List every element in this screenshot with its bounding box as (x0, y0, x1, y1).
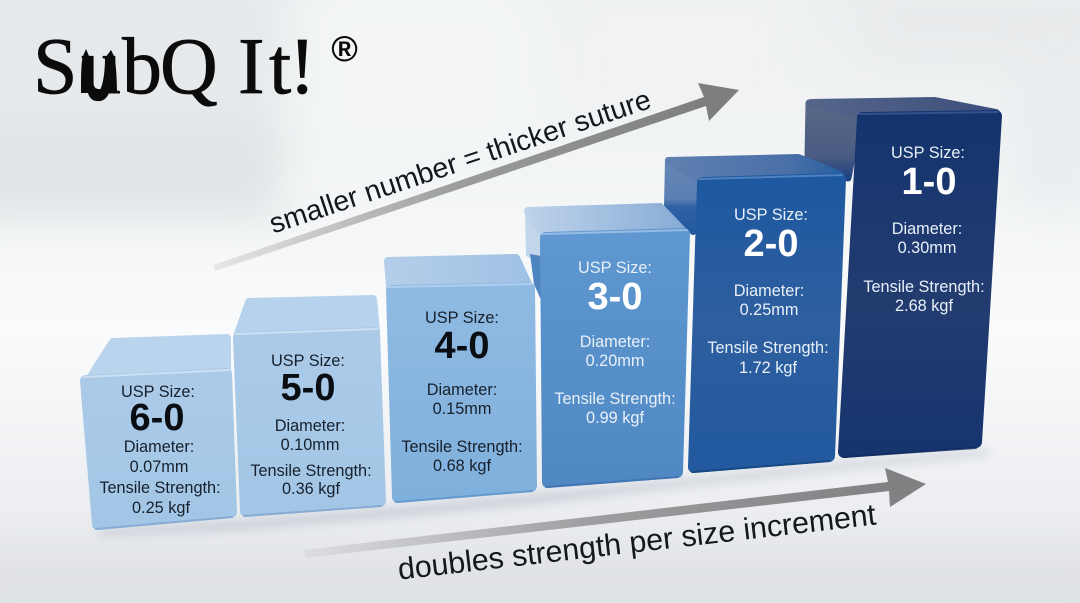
block 5-0 front face (239, 333, 380, 511)
block 6-0 text: 0.25 kgf (132, 499, 190, 517)
block 4-0 text (401, 309, 523, 475)
block 1-0 text: USP Size: (891, 144, 965, 162)
block 1-0 side face (808, 103, 860, 178)
block 4-0 front face (392, 288, 531, 497)
block 3-0 text (554, 259, 676, 427)
block 6-0 top face (90, 338, 227, 378)
block 1-0 text: Tensile Strength: (863, 278, 985, 296)
block 4-0 top face (388, 258, 528, 287)
block 2-0 side face (667, 160, 700, 232)
block 6-0 text: 0.07mm (130, 458, 188, 476)
block 2-0 text: Tensile Strength: (707, 339, 829, 357)
block 2-0 text: Diameter: (734, 282, 804, 300)
block 3-0 text: Diameter: (580, 333, 650, 351)
block 4-0 text: Tensile Strength: (401, 438, 523, 456)
arrow label: smaller number: smaller number = thicker suture (265, 84, 655, 240)
block 4-0 text: 4-0 (435, 325, 489, 367)
block 4-0 text: USP Size: (425, 309, 499, 327)
panel: block 5-0 (236, 299, 381, 516)
block 5-0 text: 5-0 (281, 367, 335, 409)
block 5-0 text: USP Size: (271, 352, 345, 370)
panel: block 1-0 (808, 101, 998, 457)
block 5-0 text: Tensile Strength: (250, 462, 372, 480)
block 2-0 front face (694, 179, 840, 467)
block 4-0 text: 0.68 kgf (433, 457, 491, 475)
block 6-0 text: USP Size: (121, 383, 195, 401)
arrow: smaller number = thicker suture (213, 83, 739, 271)
block 2-0 text (707, 206, 829, 377)
block 3-0 side face (525, 212, 541, 300)
block 5-0 text: 0.36 kgf (282, 480, 340, 498)
registered mark: ® (331, 28, 358, 69)
floor shadows (95, 449, 992, 536)
panel: block 6-0 (84, 338, 232, 529)
panel: block 3-0 (525, 207, 687, 487)
block 6-0 text: Diameter: (124, 438, 194, 456)
block 1-0 front face (844, 116, 996, 452)
icon: needle-shaped suture loop on the u (81, 49, 117, 101)
block 1-0 top face (811, 101, 996, 115)
block 6-0 text: Tensile Strength: (99, 479, 221, 497)
block 2-0 text: USP Size: (734, 206, 808, 224)
panel: block 4-0 (388, 258, 532, 502)
block 1-0 text: 0.30mm (898, 239, 956, 257)
block 2-0 top face (669, 158, 840, 179)
block 6-0 front face (86, 374, 231, 524)
block 3-0 top face (528, 207, 682, 234)
block 2-0 text: 2-0 (744, 223, 798, 265)
block 4-0 text: 0.15mm (433, 400, 491, 418)
arrow: doubles strength (304, 468, 926, 558)
block 1-0 text: 2.68 kgf (895, 297, 953, 315)
block 1-0 text: Diameter: (892, 220, 962, 238)
block 6-0 text: 6-0 (130, 397, 184, 439)
block 3-0 text: USP Size: (578, 259, 652, 277)
block 5-0 text (250, 352, 372, 498)
block 3-0 text: 0.99 kgf (586, 409, 644, 427)
block 4-0 text: Diameter: (427, 381, 497, 399)
block 5-0 text: Diameter: (275, 417, 345, 435)
block 5-0 top face (238, 299, 376, 334)
block 5-0 text: 0.10mm (281, 436, 339, 454)
block 6-0 text (99, 383, 221, 517)
block 3-0 text: 0.20mm (586, 352, 644, 370)
arrow label: doubles strength: doubles strength per size increment (396, 497, 878, 587)
panel: block 2-0 (667, 158, 842, 472)
title: SubQ It! logo: SubQIt! (33, 23, 316, 111)
block 1-0 text: 1-0 (902, 161, 956, 203)
block 3-0 front face (546, 234, 684, 482)
block 2-0 text: 0.25mm (740, 301, 798, 319)
block 2-0 text: 1.72 kgf (739, 359, 797, 377)
block 3-0 text: Tensile Strength: (554, 390, 676, 408)
block 1-0 text (863, 144, 985, 315)
block 3-0 text: 3-0 (588, 276, 642, 318)
